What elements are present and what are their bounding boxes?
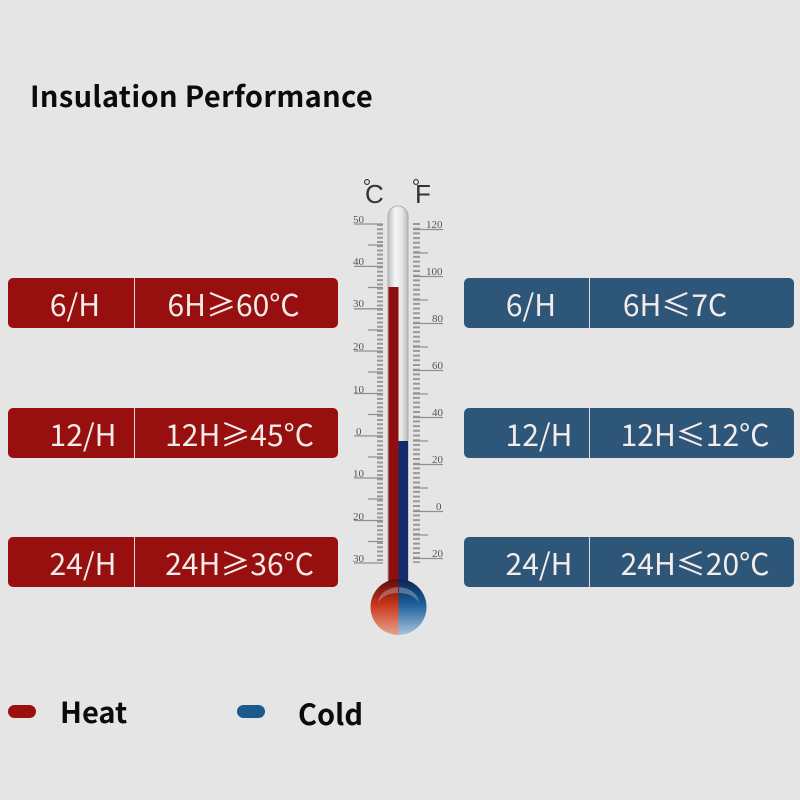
heat band: 6 hours: 6H≥60°C — [167, 281, 300, 325]
celsius scale: 40 — [353, 256, 364, 268]
cold band: 24 hours — [464, 537, 794, 587]
fahrenheit scale: 80 — [432, 313, 444, 325]
thermometer — [353, 179, 444, 635]
cold label: Cold — [298, 692, 363, 734]
unit labels: F — [415, 179, 431, 209]
heat band: 12 hours: 12H≥45°C — [165, 411, 314, 455]
cold band: 12 hours: 12H≤12°C — [621, 411, 769, 455]
fahrenheit scale: 100 — [426, 266, 443, 278]
heat band: 24 hours — [8, 537, 338, 587]
celsius scale: 10 — [353, 384, 364, 396]
heat column — [388, 287, 398, 585]
cold band: 6 hours: 6/H — [506, 281, 556, 325]
celsius scale: 50 — [353, 214, 364, 226]
fahrenheit scale: 20 — [432, 548, 444, 560]
celsius scale: 20 — [353, 341, 364, 353]
fahrenheit scale: 120 — [426, 219, 443, 231]
cold swatch — [237, 705, 265, 718]
title: Insulation Performance — [30, 74, 373, 116]
cold band: 24 hours: 24/H — [506, 540, 572, 584]
cold band: 12 hours — [464, 408, 794, 458]
heat band: 24 hours: 24H≥36°C — [165, 540, 314, 584]
cold band: 6 hours: 6H≤7C — [623, 281, 727, 325]
legend: heat — [8, 690, 127, 732]
celsius scale — [353, 214, 383, 565]
unit labels — [365, 179, 431, 209]
bulb — [370, 579, 426, 635]
fahrenheit scale: 0 — [436, 501, 442, 513]
legend: cold — [237, 692, 363, 734]
cold band: 6 hours — [464, 278, 794, 328]
heat band: 24 hours: 24/H — [50, 540, 116, 584]
heat band: 6 hours: 6/H — [50, 281, 100, 325]
heat label: Heat — [60, 690, 127, 732]
celsius scale: 30 — [353, 298, 364, 310]
celsius scale: 20 — [353, 511, 364, 523]
fahrenheit scale — [413, 219, 444, 563]
celsius scale: 10 — [353, 468, 364, 480]
cold column — [398, 441, 408, 585]
unit labels: C — [365, 179, 384, 209]
glass tube — [388, 206, 408, 585]
cold band: 24 hours: 24H≤20°C — [621, 540, 769, 584]
fahrenheit scale: 20 — [432, 454, 444, 466]
heat swatch — [8, 705, 36, 718]
celsius scale: 0 — [356, 426, 362, 438]
heat band: 12 hours: 12/H — [50, 411, 116, 455]
celsius scale: 30 — [353, 553, 364, 565]
heat band: 12 hours — [8, 408, 338, 458]
heat band: 6 hours — [8, 278, 338, 328]
fahrenheit scale: 60 — [432, 360, 444, 372]
cold band: 12 hours: 12/H — [506, 411, 572, 455]
fahrenheit scale: 40 — [432, 407, 444, 419]
